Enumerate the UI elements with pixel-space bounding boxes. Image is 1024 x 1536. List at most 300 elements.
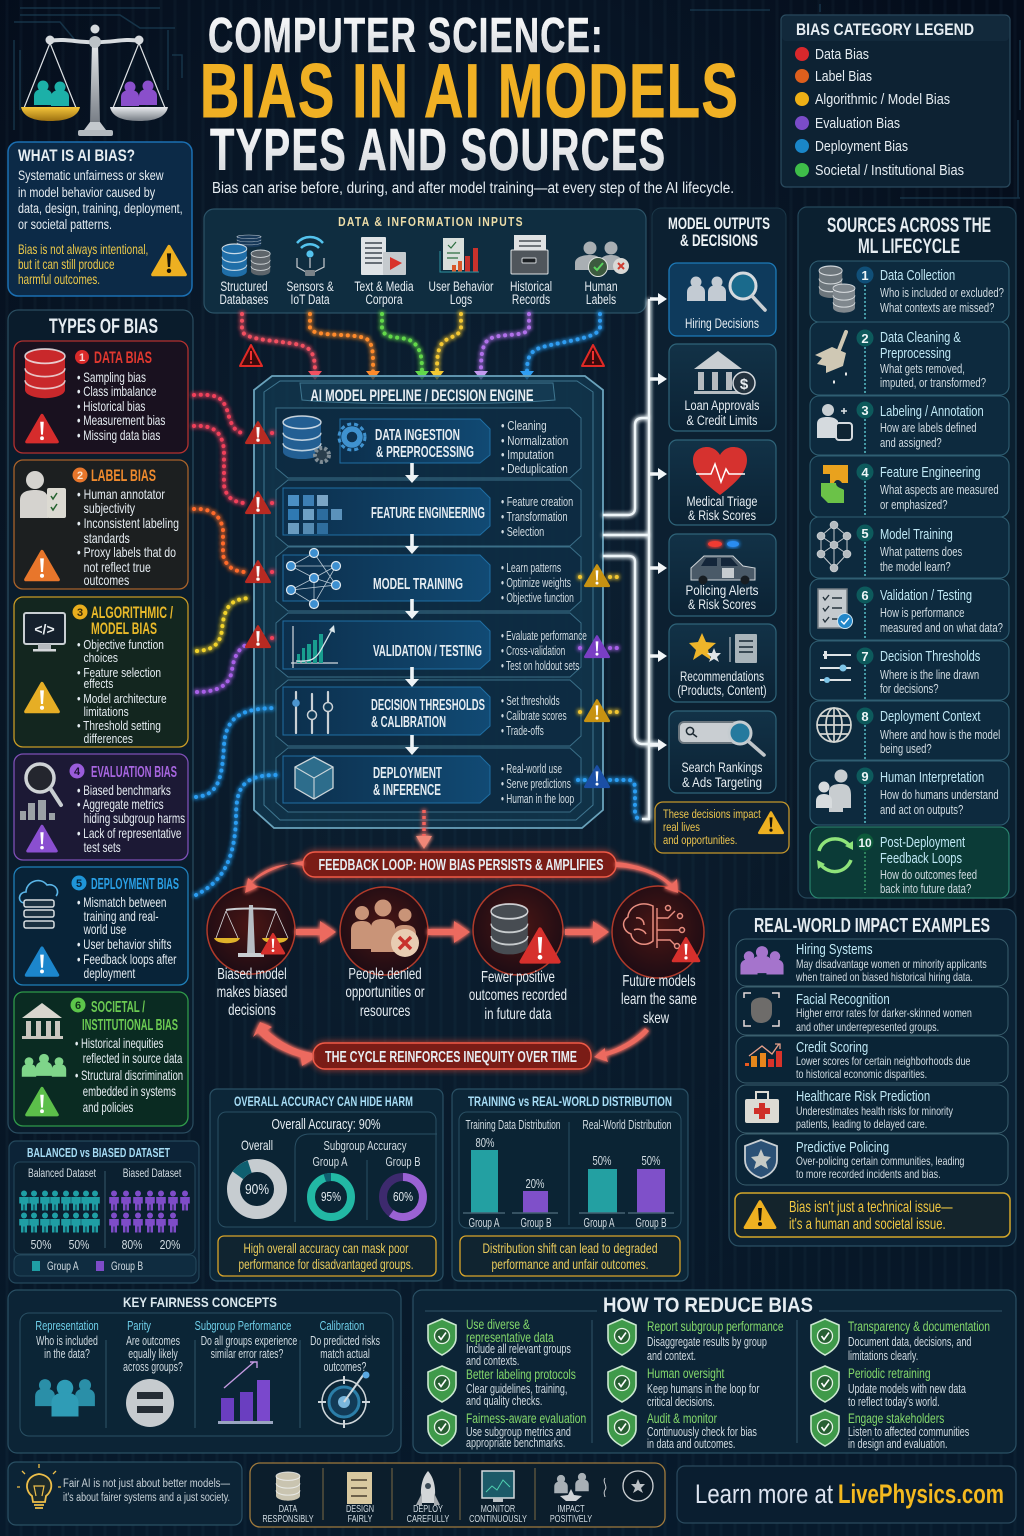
reduce bias descriptions: in data and outcomes. bbox=[647, 1438, 735, 1451]
card: medical triage bbox=[669, 440, 776, 525]
callout: accuracy: High overall accuracy can mask poor bbox=[244, 1240, 409, 1256]
row: decision thresholds bbox=[283, 687, 567, 739]
card: evaluation bias: 4 bbox=[74, 766, 81, 778]
donut: group B 60% bbox=[383, 1177, 423, 1217]
panel: learn more: Learn more at bbox=[695, 1479, 833, 1509]
icon: denied mark bbox=[391, 929, 419, 957]
panel: fair AI quote: it's about fairer systems and a just society. bbox=[63, 1492, 230, 1504]
lifecycle numbers: 2 bbox=[861, 331, 869, 346]
panel: overall accuracy can hide harm bbox=[210, 1089, 443, 1281]
card: label bias: • Inconsistent labeling bbox=[77, 516, 179, 531]
row: validation / testing bbox=[283, 621, 587, 674]
icon: database warning bbox=[491, 904, 559, 962]
panel: bias category legend: Label Bias bbox=[815, 69, 872, 85]
feedback labels: Fewer positive bbox=[481, 968, 555, 985]
panel: data and information inputs bbox=[204, 209, 646, 313]
row: data ingestion: • Imputation bbox=[501, 449, 554, 462]
card: loan approvals: & Credit Limits bbox=[686, 413, 758, 428]
lifecycle numbers: 9 bbox=[861, 769, 869, 784]
impact text: Over-policing certain communities, leading bbox=[796, 1155, 964, 1168]
card: societal / institutional bias: • Historical inequities bbox=[75, 1036, 164, 1051]
card: data bias bbox=[14, 341, 188, 453]
card: algorithmic / model bias: </> bbox=[34, 621, 55, 637]
input labels: Logs bbox=[450, 292, 472, 307]
feedback labels: resources bbox=[360, 1002, 410, 1019]
panel: overall accuracy can hide harm: OVERALL ACCURACY CAN HIDE HARM bbox=[234, 1094, 413, 1109]
lifecycle text: Validation / Testing bbox=[880, 586, 972, 603]
panel: bias category legend: Evaluation Bias bbox=[815, 116, 900, 132]
card: data bias: DATA BIAS bbox=[94, 349, 152, 367]
bias connectors from types to pipeline bbox=[194, 395, 622, 895]
impact text: May disadvantage women or minority applicants bbox=[796, 958, 987, 971]
lifecycle text: or emphasized? bbox=[880, 499, 947, 512]
panel: bias category legend: Societal / Institutional Bias bbox=[815, 163, 964, 179]
input labels: Databases bbox=[219, 292, 268, 307]
row: decision thresholds: • Trade-offs bbox=[501, 724, 544, 739]
card: label bias: • Human annotator bbox=[77, 487, 165, 502]
card: societal / institutional bias: • Structural discrimination bbox=[75, 1068, 183, 1083]
row: model training: • Objective function bbox=[501, 591, 574, 606]
card: algorithmic / model bias: effects bbox=[84, 677, 113, 691]
panel: how to reduce bias: HOW TO REDUCE BIAS bbox=[603, 1294, 813, 1317]
panel: training vs real-world distribution: Training Data Distribution bbox=[466, 1118, 561, 1132]
card: deployment bias: • User behavior shifts bbox=[77, 936, 171, 952]
lifecycle text: Where and how is the model bbox=[880, 729, 1000, 742]
feedback labels: skew bbox=[643, 1009, 669, 1026]
row: deployment and inference: • Real-world use bbox=[501, 762, 562, 777]
panel: bias category legend: Deployment Bias bbox=[815, 139, 908, 155]
lifecycle numbers: 6 bbox=[861, 588, 869, 603]
row: feature engineering: • Transformation bbox=[501, 511, 568, 524]
card: societal / institutional bias: and policies bbox=[83, 1100, 133, 1115]
step labels: DESIGN bbox=[346, 1503, 374, 1514]
donut: overall 90%: 90% bbox=[245, 1181, 269, 1198]
lifecycle text: What contexts are missed? bbox=[880, 302, 994, 315]
panel: what is AI bias: data, design, training, deployment, bbox=[18, 201, 183, 216]
panel: key fairness concepts: match actual bbox=[320, 1348, 370, 1361]
row: decision thresholds: • Set thresholds bbox=[501, 694, 560, 709]
icon: input warning left bbox=[240, 345, 262, 366]
card: recommendations: (Products, Content) bbox=[678, 683, 766, 698]
lifecycle text: What patterns does bbox=[880, 546, 963, 559]
lifecycle text: for decisions? bbox=[880, 683, 939, 696]
panel: bias category legend: Algorithmic / Model Bias bbox=[815, 92, 950, 108]
input labels: Text & Media bbox=[354, 279, 414, 294]
icon: data collection bbox=[819, 266, 855, 313]
card: societal / institutional bias: INSTITUTIONAL BIAS bbox=[82, 1017, 178, 1034]
icon: structured databases bbox=[222, 235, 270, 277]
reduce bias titles: Engage stakeholders bbox=[848, 1411, 944, 1426]
reduce bias descriptions: limitations clearly. bbox=[848, 1350, 918, 1363]
lifecycle text: Who is included or excluded? bbox=[880, 287, 1004, 300]
impact text: Higher error rates for darker-skinned women bbox=[796, 1007, 972, 1020]
lifecycle text: Data Cleaning & bbox=[880, 328, 961, 345]
callout: accuracy: performance for disadvantaged groups. bbox=[238, 1256, 414, 1272]
icon: network bbox=[817, 521, 851, 572]
reduce bias descriptions: Disaggregate results by group bbox=[647, 1336, 767, 1349]
card: deployment bias: training and real- bbox=[84, 908, 159, 924]
panel: feedback loop bbox=[207, 852, 704, 1069]
panel: key fairness concepts: equally likely bbox=[128, 1348, 178, 1361]
row: decision thresholds: DECISION THRESHOLDS bbox=[371, 697, 485, 714]
panel: overall accuracy can hide harm: Group B bbox=[386, 1154, 420, 1169]
callout: distribution bbox=[460, 1236, 680, 1276]
card: societal / institutional bias: SOCIETAL / bbox=[91, 999, 145, 1016]
lifecycle numbers: 1 bbox=[861, 268, 869, 283]
lifecycle text: and assigned? bbox=[880, 437, 942, 450]
panel: overall accuracy can hide harm: Overall Accuracy: 90% bbox=[272, 1117, 381, 1133]
impact text: Lower scores for certain neighborhoods due bbox=[796, 1055, 970, 1068]
reduce bias titles: Fairness-aware evaluation bbox=[466, 1411, 586, 1426]
icon: credit scoring bbox=[745, 1044, 782, 1067]
impact text: and other underrepresented groups. bbox=[796, 1021, 939, 1034]
card: algorithmic / model bias: • Objective function bbox=[77, 638, 164, 652]
icon: representation people bbox=[35, 1379, 95, 1416]
icon: text and media bbox=[361, 237, 406, 275]
icon: historical records bbox=[511, 235, 548, 274]
panel: overall accuracy can hide harm: Subgroup Accuracy bbox=[324, 1138, 407, 1153]
lifecycle numbers: 8 bbox=[861, 709, 869, 724]
lifecycle numbers: 7 bbox=[861, 649, 869, 664]
step labels: CAREFULLY bbox=[407, 1513, 449, 1524]
card: deployment bias bbox=[14, 867, 188, 985]
card: evaluation bias bbox=[14, 754, 188, 860]
panel: what is AI bias: harmful outcomes. bbox=[18, 271, 100, 287]
icon: brain warning bbox=[624, 904, 699, 961]
card: search rankings bbox=[669, 711, 776, 793]
reduce bias titles: Transparency & documentation bbox=[848, 1319, 990, 1334]
step labels: POSITIVELY bbox=[550, 1513, 592, 1524]
dataset legend: Group A bbox=[47, 1261, 79, 1273]
card: deployment bias: DEPLOYMENT BIAS bbox=[91, 876, 179, 893]
input labels: Historical bbox=[510, 279, 552, 294]
bias warning icons on pipeline right bbox=[585, 565, 609, 787]
card: label bias: outcomes bbox=[84, 573, 129, 588]
input connectors bbox=[242, 314, 600, 374]
pipeline flow arrows bbox=[405, 463, 419, 755]
panel: key fairness concepts: Do all groups experience bbox=[201, 1335, 297, 1348]
panel: bias category legend bbox=[781, 15, 1010, 187]
card: algorithmic / model bias: MODEL BIAS bbox=[91, 620, 157, 638]
icon: sliders bbox=[820, 651, 851, 683]
panel: balanced vs biased dataset: 50% bbox=[31, 1238, 52, 1252]
callout: decisions impact bbox=[655, 802, 789, 853]
donut: group A 95% bbox=[311, 1177, 351, 1217]
icons: shields bbox=[428, 1319, 839, 1446]
icon: human interpretation bbox=[816, 770, 851, 812]
row: feature engineering: FEATURE ENGINEERING bbox=[371, 505, 485, 522]
impact text: to more recorded incidents and bias. bbox=[796, 1168, 941, 1181]
input labels: Corpora bbox=[366, 292, 403, 307]
panel: key fairness concepts bbox=[8, 1290, 401, 1453]
card: evaluation bias: • Biased benchmarks bbox=[77, 782, 171, 798]
lifecycle text: How is performance bbox=[880, 607, 964, 620]
icon: human labels bbox=[575, 242, 629, 276]
card: data bias: 1 bbox=[79, 352, 85, 364]
panel: what is AI bias: or societal patterns. bbox=[18, 217, 112, 232]
bar chart: real-world: Group B bbox=[636, 1215, 666, 1230]
card: evaluation bias: hiding subgroup harms bbox=[84, 810, 185, 826]
card: hiring decisions: Hiring Decisions bbox=[685, 316, 759, 331]
card: data bias: • Sampling bias bbox=[77, 369, 146, 385]
title: TYPES AND SOURCES bbox=[210, 116, 666, 183]
feedback labels: opportunities or bbox=[346, 983, 425, 1000]
card: evaluation bias: • Lack of representative bbox=[77, 825, 182, 841]
panel: key fairness concepts: across groups? bbox=[123, 1361, 183, 1374]
icon: parity equals bbox=[126, 1379, 174, 1427]
card: deployment bias: world use bbox=[83, 921, 127, 937]
panel: key fairness concepts: outcomes? bbox=[324, 1361, 366, 1374]
row: deployment and inference: • Human in the loop bbox=[501, 792, 574, 807]
card: loan approvals bbox=[669, 344, 776, 431]
feedback labels: makes biased bbox=[217, 983, 287, 1000]
reduce bias titles: Use diverse & bbox=[466, 1317, 530, 1332]
lifecycle numbers: 4 bbox=[861, 465, 869, 480]
icon: broom bbox=[815, 332, 847, 382]
balanced people bbox=[19, 1190, 100, 1232]
row: model training: MODEL TRAINING bbox=[373, 576, 463, 593]
card: societal / institutional bias bbox=[14, 992, 188, 1126]
lifecycle text: Feature Engineering bbox=[880, 463, 981, 480]
reduce bias descriptions: Listen to affected communities bbox=[848, 1426, 970, 1439]
lifecycle text: the model learn? bbox=[880, 561, 951, 574]
icon: star badge bbox=[604, 1471, 653, 1501]
input connector arrowheads bbox=[308, 371, 534, 380]
pipeline row frames bbox=[276, 408, 581, 812]
card: data bias: • Measurement bias bbox=[77, 412, 165, 428]
panel: training vs real-world distribution bbox=[452, 1089, 688, 1281]
reduce bias descriptions: Keep humans in the loop for bbox=[647, 1383, 760, 1396]
row: data ingestion bbox=[283, 416, 568, 476]
step labels: IMPACT bbox=[557, 1503, 585, 1514]
card: medical triage: Medical Triage bbox=[686, 494, 758, 509]
panel: balanced vs biased dataset: 20% bbox=[160, 1238, 181, 1252]
row: feature engineering: • Feature creation bbox=[501, 496, 573, 509]
panel: what is AI bias: WHAT IS AI BIAS? bbox=[18, 146, 135, 165]
reduce bias descriptions: appropriate benchmarks. bbox=[466, 1437, 565, 1450]
icon: hiring systems bbox=[740, 946, 784, 974]
callout: distribution: performance and unfair outcomes. bbox=[492, 1256, 648, 1272]
donut: overall 90% bbox=[234, 1166, 280, 1212]
feedback labels: People denied bbox=[348, 965, 422, 982]
lifecycle timeline bbox=[864, 285, 866, 893]
card: algorithmic / model bias: differences bbox=[84, 732, 133, 746]
card: algorithmic / model bias bbox=[14, 597, 188, 747]
step labels: FAIRLY bbox=[348, 1513, 372, 1524]
row: validation / testing: • Test on holdout sets bbox=[501, 659, 579, 674]
bar chart: real-world: 50% bbox=[642, 1153, 661, 1168]
card: loan approvals: Loan Approvals bbox=[684, 398, 760, 413]
callout: decisions impact: These decisions impact bbox=[663, 808, 761, 821]
panel: bias category legend: Data Bias bbox=[815, 47, 869, 63]
step labels: DEPLOY bbox=[413, 1503, 443, 1514]
banner: cycle reinforces: THE CYCLE REINFORCES INEQUITY OVER TIME bbox=[325, 1049, 577, 1066]
reduce bias descriptions: and contexts. bbox=[466, 1355, 519, 1368]
banner: feedback loop title bbox=[303, 852, 616, 877]
panel: sources across the ML lifecycle bbox=[798, 207, 1016, 898]
impact text: Healthcare Risk Prediction bbox=[796, 1087, 930, 1104]
icon: monitor continuously bbox=[482, 1471, 514, 1502]
card: deployment bias: • Mismatch between bbox=[77, 894, 166, 910]
panel: training vs real-world distribution: Real-World Distribution bbox=[582, 1118, 672, 1132]
title: COMPUTER SCIENCE: bbox=[208, 8, 604, 64]
icon: deploy rocket bbox=[416, 1471, 440, 1505]
bar chart: training bbox=[463, 1135, 558, 1230]
panel: key fairness concepts: in the data? bbox=[44, 1348, 90, 1361]
panel: model outputs background bbox=[652, 208, 786, 848]
card: evaluation bias: • Aggregate metrics bbox=[77, 796, 164, 812]
row: data ingestion: DATA INGESTION bbox=[375, 427, 460, 444]
reduce bias descriptions: to reflect today's world. bbox=[848, 1396, 940, 1409]
row: deployment and inference: DEPLOYMENT bbox=[373, 765, 442, 782]
blue connector to outputs note bbox=[578, 780, 642, 819]
row: decision thresholds: • Calibrate scores bbox=[501, 709, 567, 724]
row: deployment and inference bbox=[283, 756, 574, 807]
card: algorithmic / model bias: • Feature selection bbox=[77, 666, 161, 680]
icon: checklist bbox=[818, 589, 852, 628]
input labels: Records bbox=[512, 292, 550, 307]
lifecycle text: What gets removed, bbox=[880, 363, 965, 376]
reduce bias descriptions: Continuously check for bias bbox=[647, 1426, 757, 1439]
lifecycle text: Preprocessing bbox=[880, 344, 951, 361]
impact text: Facial Recognition bbox=[796, 990, 890, 1007]
banner: cycle reinforces bbox=[313, 1043, 591, 1069]
impact text: when trained on biased historical hiring data. bbox=[795, 971, 973, 984]
feedback labels: learn the same bbox=[621, 990, 697, 1007]
panel: key fairness concepts: Subgroup Performance bbox=[195, 1320, 291, 1333]
icon: globe bbox=[817, 708, 851, 742]
bar chart: training: 80% bbox=[476, 1135, 495, 1150]
row: model training: • Optimize weights bbox=[501, 576, 571, 591]
row: deployment and inference: • Serve predictions bbox=[501, 777, 571, 792]
card: deployment bias: deployment bbox=[84, 965, 136, 981]
lifecycle text: Model Training bbox=[880, 525, 953, 542]
card: algorithmic / model bias: 3 bbox=[77, 607, 83, 619]
callout: human and societal issue: it's a human and societal issue. bbox=[789, 1215, 946, 1232]
impact text: Credit Scoring bbox=[796, 1038, 868, 1055]
card: label bias: not reflect true bbox=[84, 560, 151, 575]
lifecycle text: How are labels defined bbox=[880, 422, 976, 435]
feedback labels: Biased model bbox=[217, 965, 287, 982]
bias warning icons on pipeline left bbox=[246, 422, 270, 647]
card: evaluation bias: test sets bbox=[84, 839, 121, 855]
row: data ingestion: • Normalization bbox=[501, 435, 568, 448]
icon: labeling person bbox=[817, 404, 852, 440]
step labels: CONTINUOUSLY bbox=[469, 1513, 527, 1524]
donut: group A 95%: 95% bbox=[321, 1189, 341, 1204]
card: recommendations: Recommendations bbox=[680, 669, 764, 684]
lifecycle text: Where is the line drawn bbox=[880, 669, 979, 682]
impact text: Hiring Systems bbox=[796, 940, 873, 957]
icon: data responsibly bbox=[276, 1472, 300, 1501]
feedback labels: in future data bbox=[485, 1005, 552, 1022]
bar chart: training: Group B bbox=[520, 1215, 552, 1230]
card: label bias: standards bbox=[84, 531, 130, 546]
lifecycle text bbox=[880, 266, 1004, 896]
impact text bbox=[795, 940, 987, 1181]
card: societal / institutional bias: reflected in source data bbox=[83, 1051, 183, 1066]
panel: what is AI bias: Systematic unfairness or skew bbox=[18, 168, 164, 183]
panel: key fairness concepts: Are outcomes bbox=[126, 1335, 180, 1348]
bar chart: real-world: 50% bbox=[592, 1153, 612, 1168]
feedback labels: outcomes recorded bbox=[469, 986, 567, 1003]
callout: human and societal issue: Bias isn't just a technical issue— bbox=[789, 1198, 953, 1215]
banner: feedback loop title: FEEDBACK LOOP: HOW BIAS PERSISTS & AMPLIFIES bbox=[318, 857, 604, 874]
icon: healthcare bbox=[745, 1092, 779, 1123]
panel: how to reduce bias bbox=[413, 1290, 1016, 1453]
reduce bias titles: Better labeling protocols bbox=[466, 1367, 576, 1382]
card: loan approvals: $ bbox=[740, 376, 749, 393]
callout: human and societal issue bbox=[735, 1193, 1010, 1237]
callout: accuracy bbox=[218, 1236, 436, 1276]
card: evaluation bias: EVALUATION BIAS bbox=[91, 764, 177, 781]
callout: distribution: Distribution shift can lead to degraded bbox=[482, 1240, 658, 1256]
input labels: Sensors & bbox=[286, 279, 334, 294]
reduce bias titles: Periodic retraining bbox=[848, 1366, 931, 1381]
panel: key fairness concepts: Who is included bbox=[36, 1335, 98, 1348]
icon: facial recognition bbox=[744, 993, 779, 1026]
heading: model outputs: MODEL OUTPUTS bbox=[668, 214, 770, 233]
row: validation / testing: VALIDATION / TESTING bbox=[373, 643, 482, 660]
panel: overall accuracy can hide harm: Group A bbox=[312, 1154, 348, 1169]
icon: light bulb bbox=[17, 1464, 61, 1508]
panel: training vs real-world distribution: TRAINING vs REAL-WORLD DISTRIBUTION bbox=[468, 1094, 672, 1109]
row: data ingestion: • Deduplication bbox=[501, 463, 568, 476]
row: validation / testing: • Evaluate performance bbox=[501, 629, 587, 644]
step labels: DATA bbox=[279, 1503, 298, 1514]
impact text: patients, leading to delayed care. bbox=[796, 1118, 927, 1131]
card: algorithmic / model bias: ALGORITHMIC / bbox=[91, 604, 173, 622]
bar chart: real-world: Group A bbox=[584, 1215, 615, 1230]
icon: sensors bbox=[297, 237, 324, 276]
feedback labels: Future models bbox=[622, 972, 696, 989]
icon: impact people bbox=[554, 1473, 589, 1501]
impact text: to historical economic disparities. bbox=[796, 1068, 927, 1081]
panel: types of bias bbox=[8, 310, 193, 1133]
panel: AI model pipeline: AI MODEL PIPELINE / DECISION ENGINE bbox=[310, 386, 534, 405]
reduce bias descriptions: Clear guidelines, training, bbox=[466, 1383, 567, 1396]
lifecycle text: Human Interpretation bbox=[880, 768, 984, 785]
lifecycle text: Feedback Loops bbox=[880, 849, 962, 866]
reduce bias descriptions: in design and evaluation. bbox=[848, 1438, 947, 1451]
biased people bbox=[109, 1190, 190, 1232]
card: label bias: LABEL BIAS bbox=[91, 467, 156, 485]
panel: AI model pipeline bbox=[254, 376, 603, 828]
panel: learn more bbox=[677, 1466, 1016, 1523]
subtitle: Bias can arise before, during, and after model training—at every step of the AI lifecycle. bbox=[212, 180, 734, 197]
reduce bias titles: Report subgroup performance bbox=[647, 1319, 784, 1334]
lifecycle text: Deployment Context bbox=[880, 707, 981, 724]
panel: overall accuracy can hide harm: Overall bbox=[241, 1137, 273, 1153]
heading: model outputs: & DECISIONS bbox=[680, 231, 758, 250]
output arrowheads bbox=[650, 293, 667, 751]
row: feature engineering bbox=[283, 488, 573, 539]
lifecycle text: being used? bbox=[880, 743, 932, 756]
input labels: Human bbox=[584, 279, 618, 294]
lifecycle text: Post-Deployment bbox=[880, 833, 965, 850]
card: algorithmic / model bias: limitations bbox=[84, 705, 129, 719]
panel: types of bias: TYPES OF BIAS bbox=[49, 315, 158, 338]
panel: balanced vs biased dataset: 50% bbox=[69, 1238, 90, 1252]
card: algorithmic / model bias: choices bbox=[84, 651, 118, 665]
lifecycle cards bbox=[810, 261, 1009, 898]
panel: key fairness concepts: similar error rates? bbox=[211, 1348, 283, 1361]
lifecycle numbers: 3 bbox=[861, 403, 869, 418]
panel: what is AI bias: Bias is not always intentional, bbox=[18, 241, 148, 257]
icon: biased model scale bbox=[214, 905, 288, 957]
card: hiring decisions bbox=[669, 263, 776, 336]
impact text: Predictive Policing bbox=[796, 1138, 889, 1155]
